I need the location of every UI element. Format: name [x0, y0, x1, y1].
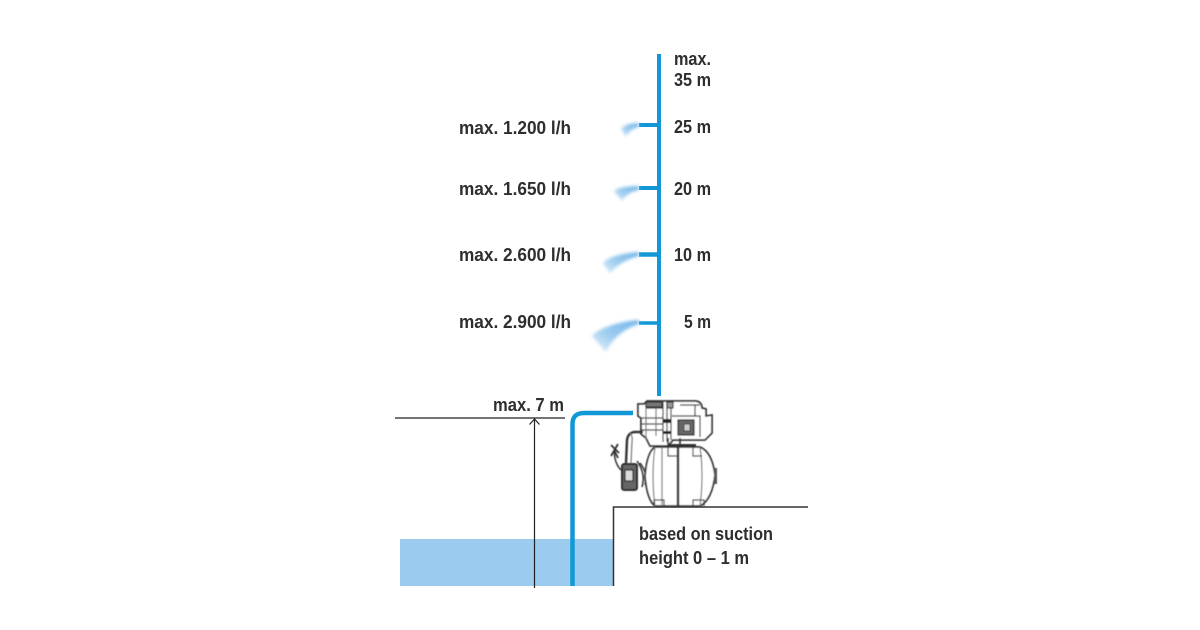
suction height marker: [395, 418, 565, 588]
flow label: 1.650 l/h: max. 1.650 l/h: [459, 178, 571, 199]
flow label: 2.900 l/h: max. 2.900 l/h: [459, 311, 571, 332]
height label: max. 35 m: 35 m: [674, 69, 711, 90]
label: max 7 m: max. 7 m: [493, 394, 564, 415]
flow label: 2.600 l/h: max. 2.600 l/h: [459, 244, 571, 265]
icon: pump with pressure tank: [611, 401, 717, 506]
height label: max. 35 m: [674, 48, 711, 90]
note: suction height: [639, 523, 773, 568]
tank: [645, 447, 715, 506]
delivery pipe with outlets: [639, 54, 659, 396]
pump head: [638, 401, 712, 446]
water reservoir: [400, 539, 613, 586]
height label: 25 m: 25 m: [674, 116, 711, 137]
note: suction height: height 0 – 1 m: [639, 547, 749, 568]
flow label: 1.200 l/h: max. 1.200 l/h: [459, 117, 571, 138]
height label: 20 m: 20 m: [674, 178, 711, 199]
height label: 10 m: 10 m: [674, 244, 711, 265]
gauge fitting: [622, 464, 637, 490]
height label: 5 m: 5 m: [684, 311, 711, 332]
hose and plug: [626, 432, 643, 463]
suction pipe: [572, 413, 633, 586]
water sprays: [592, 123, 639, 352]
ground ledge: [614, 507, 808, 586]
height label: max. 35 m: max.: [674, 48, 711, 69]
note: suction height: based on suction: [639, 523, 773, 544]
